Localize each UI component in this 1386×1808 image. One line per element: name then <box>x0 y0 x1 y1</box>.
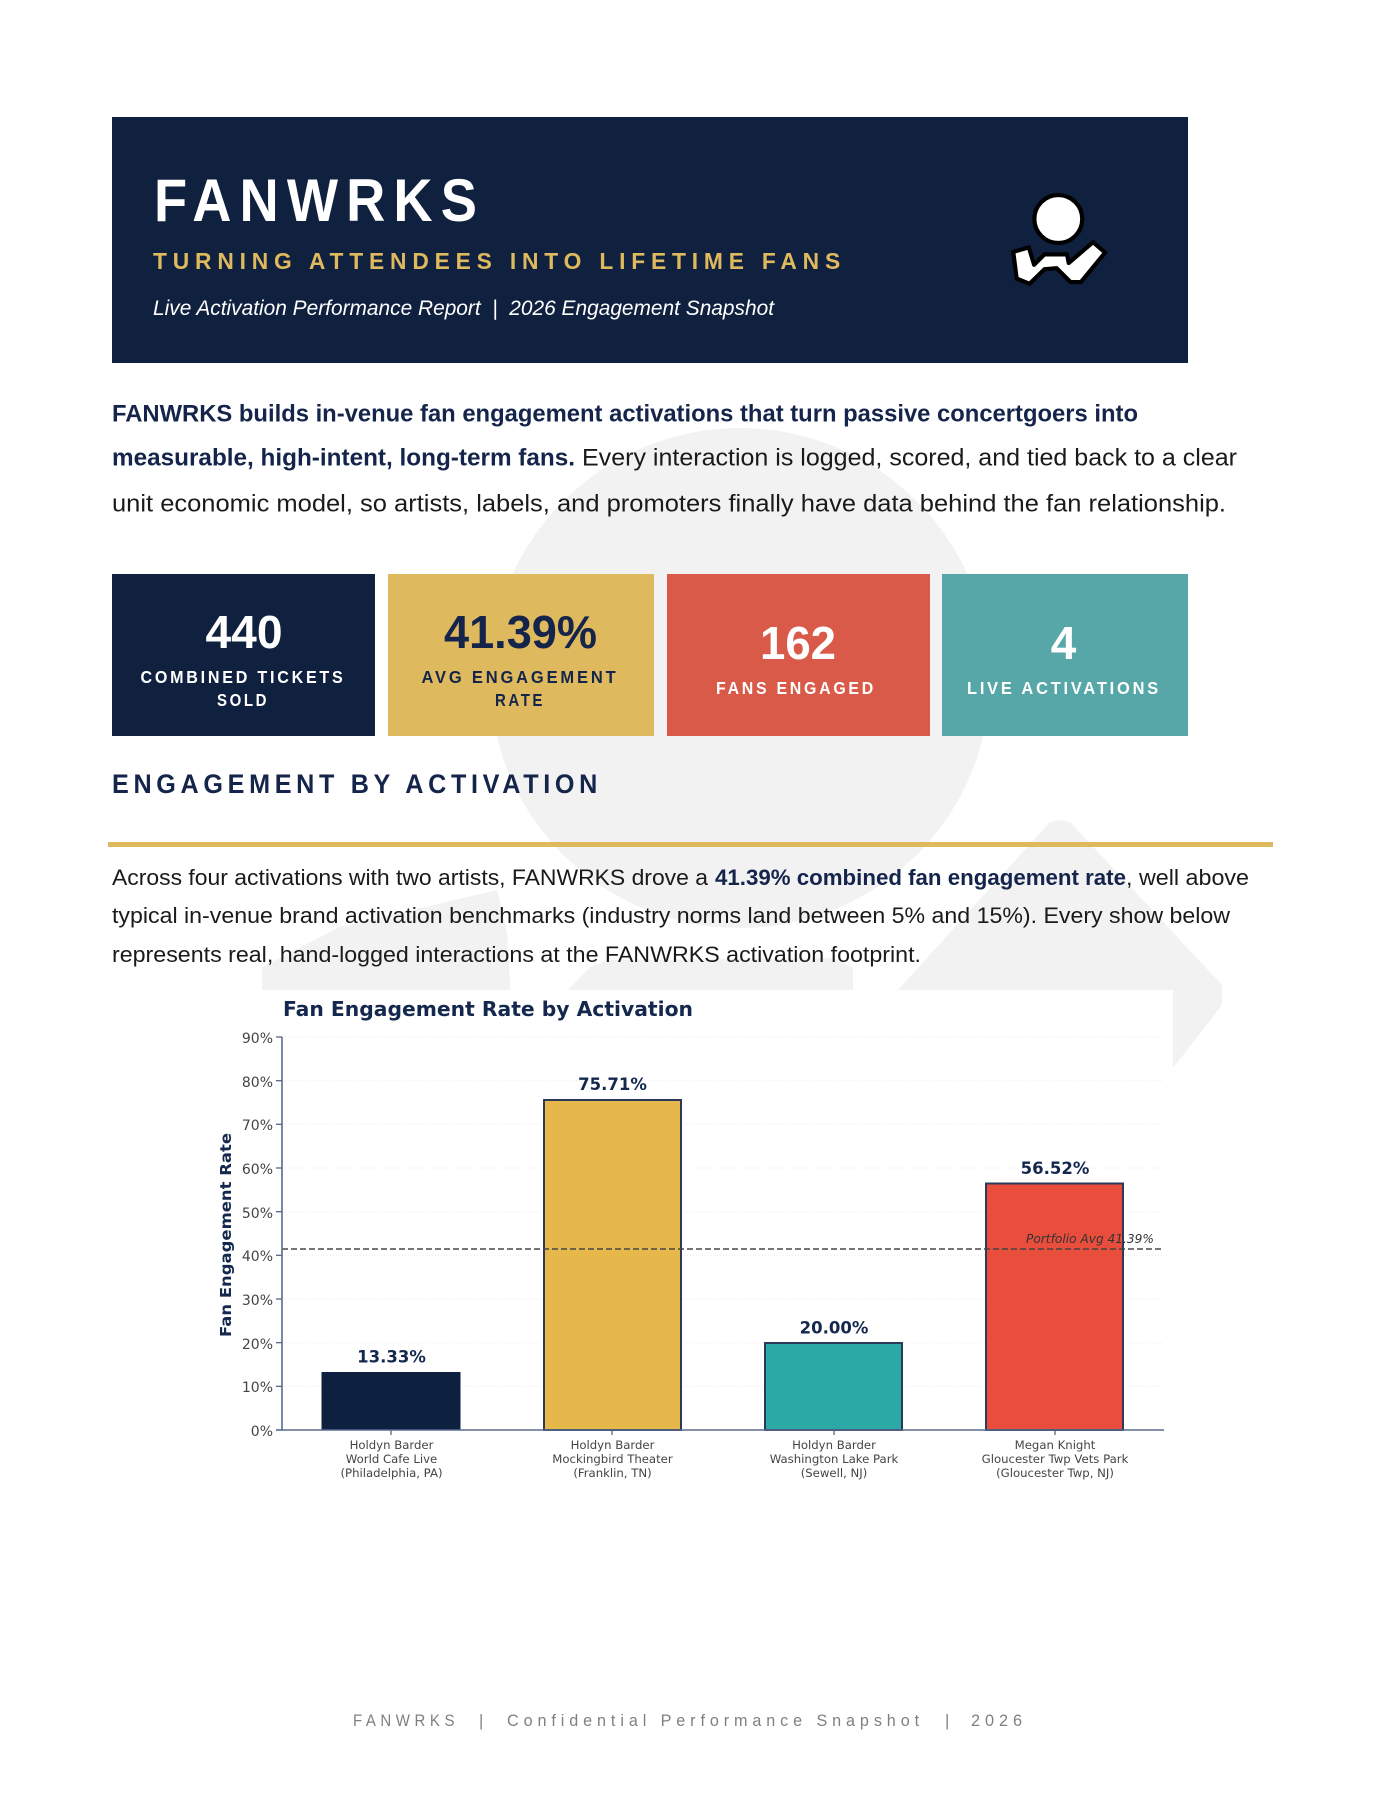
KPI card: combined tickets sold: 440 <box>206 606 282 658</box>
KPI card: average engagement rate: AVG ENGAGEMENT <box>422 667 618 687</box>
footer: Confidential Performance Snapshot <box>507 1712 924 1730</box>
watermark: fan logo <box>262 428 1222 1340</box>
icon: fan logo <box>1013 195 1105 284</box>
KPI card: average engagement rate: 41.39% <box>444 606 597 658</box>
x axis category labels: (Sewell, NJ) <box>801 1466 867 1480</box>
y axis tick labels: 30% <box>242 1293 273 1309</box>
y axis tick labels: 0% <box>251 1424 273 1440</box>
x axis category labels <box>340 1438 1129 1480</box>
KPI card: live activations: LIVE ACTIVATIONS <box>967 678 1161 698</box>
KPI card: combined tickets sold: SOLD <box>217 690 269 710</box>
bar: Mockingbird Theater <box>544 1100 681 1430</box>
footer: FANWRKS <box>353 1712 459 1730</box>
engagement paragraph: represents real, hand-logged interactions at the FANWRKS activation footprint. <box>112 942 921 967</box>
average reference line <box>282 1248 1164 1250</box>
y axis tick labels: 90% <box>242 1031 273 1047</box>
footer: | <box>945 1712 954 1730</box>
y axis tick labels: 40% <box>242 1249 273 1265</box>
x axis category labels: Gloucester Twp Vets Park <box>982 1452 1129 1466</box>
x axis category labels: (Philadelphia, PA) <box>340 1466 443 1480</box>
KPI card: fans engaged: 162 <box>760 617 836 669</box>
tagline: TURNING ATTENDEES INTO LIFETIME FANS <box>153 248 846 274</box>
footer <box>353 1712 1027 1730</box>
footer: 2026 <box>971 1712 1027 1730</box>
bar value labels: 75.71% <box>578 1075 647 1094</box>
y axis tick labels: 60% <box>242 1162 273 1178</box>
KPI card: combined tickets sold <box>112 574 375 736</box>
intro paragraph <box>112 400 1237 518</box>
bar value labels <box>357 1075 1090 1366</box>
reference line label: Portfolio Avg 41.39% <box>1026 1231 1154 1246</box>
y axis tick labels: 20% <box>242 1337 273 1353</box>
bar value labels: 56.52% <box>1021 1159 1090 1178</box>
y axis tick labels: 70% <box>242 1118 273 1134</box>
y axis tick labels: 10% <box>242 1380 273 1396</box>
x axis category labels: Holdyn Barder <box>571 1438 655 1452</box>
bar: Washington Lake Park <box>765 1343 902 1430</box>
header banner <box>112 117 1188 363</box>
engagement paragraph: 41.39% combined fan engagement rate <box>715 865 1126 890</box>
KPI card: live activations: 4 <box>1051 617 1077 669</box>
x axis category labels: Holdyn Barder <box>792 1438 876 1452</box>
report subtitle: Live Activation Performance Report | 2026 Engagement Snapshot <box>153 297 775 320</box>
bar value labels: 20.00% <box>800 1318 869 1338</box>
footer: | <box>479 1712 488 1730</box>
y axis tick labels: 50% <box>242 1206 273 1222</box>
KPI card: fans engaged: FANS ENGAGED <box>716 678 876 698</box>
bar: World Cafe Live <box>322 1372 460 1430</box>
KPI card: combined tickets sold: COMBINED TICKETS <box>140 667 346 687</box>
intro paragraph: unit economic model, so artists, labels, and promoters finally have data behind the fan relationship. <box>112 490 1226 518</box>
intro paragraph: FANWRKS builds in-venue fan engagement activations that turn passive concertgoers into <box>112 400 1138 428</box>
engagement paragraph: typical in-venue brand activation benchmarks (industry norms land between 5% and 15%). Every show below <box>112 903 1231 928</box>
y axis tick labels <box>242 1031 273 1440</box>
bar: Gloucester Twp Vets Park <box>986 1184 1123 1430</box>
KPI card: average engagement rate <box>388 574 654 736</box>
intro paragraph: measurable, high-intent, long-term fans. <box>112 444 575 472</box>
section heading: ENGAGEMENT BY ACTIVATION <box>112 769 602 799</box>
x axis category labels: World Cafe Live <box>346 1452 437 1466</box>
KPI card: live activations <box>942 574 1188 736</box>
y axis tick labels: 80% <box>242 1075 273 1091</box>
engagement paragraph: , well above <box>1126 865 1249 890</box>
x axis category labels: Washington Lake Park <box>770 1452 899 1466</box>
intro paragraph: Every interaction is logged, scored, and tied back to a clear <box>582 444 1237 472</box>
x axis category labels: (Franklin, TN) <box>573 1466 652 1480</box>
x axis category labels: Megan Knight <box>1015 1438 1096 1452</box>
x axis category labels: Holdyn Barder <box>350 1438 434 1452</box>
y axis label: Fan Engagement Rate <box>217 1133 235 1337</box>
x axis category labels: (Gloucester Twp, NJ) <box>996 1466 1114 1480</box>
chart title: Fan Engagement Rate by Activation <box>283 997 693 1021</box>
x axis category labels: Mockingbird Theater <box>552 1452 673 1466</box>
engagement paragraph: Across four activations with two artists, FANWRKS drove a <box>112 865 708 890</box>
KPI card: fans engaged <box>667 574 930 736</box>
engagement paragraph <box>112 865 1249 967</box>
KPI card: average engagement rate: RATE <box>495 690 545 710</box>
bar value labels: 13.33% <box>357 1348 426 1366</box>
brand title: FANWRKS <box>154 167 485 234</box>
bar chart: fan engagement rate by activation <box>217 990 1173 1510</box>
